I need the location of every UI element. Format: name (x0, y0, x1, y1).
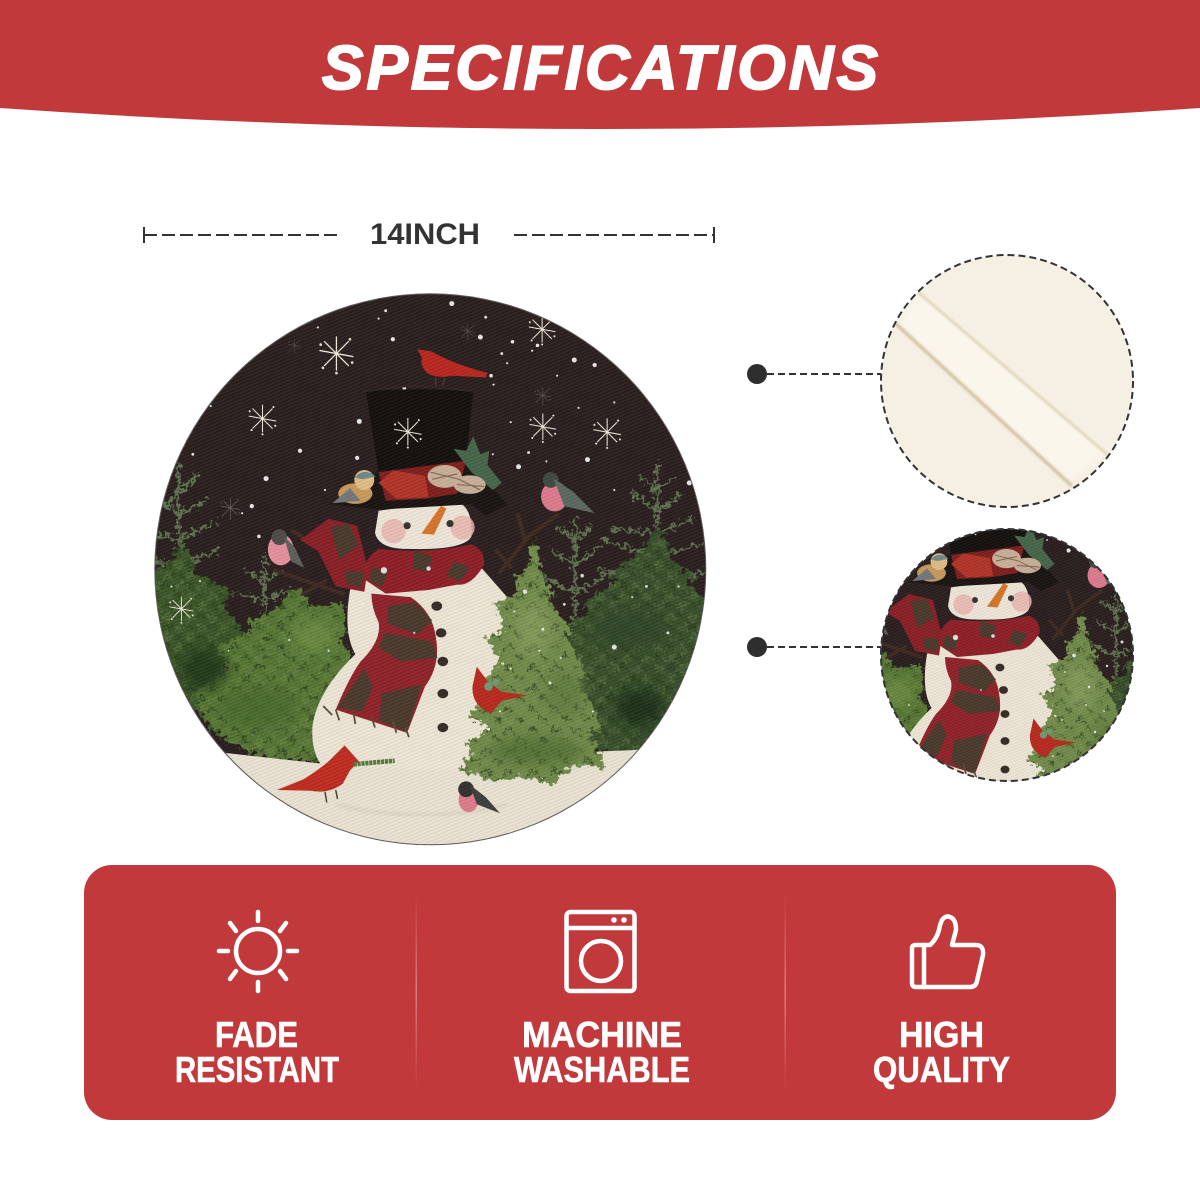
features panel (84, 865, 1116, 1120)
dimension line: 14 inch (144, 218, 714, 251)
callout marker (747, 364, 881, 384)
feature: fade resistant (175, 912, 339, 1090)
header banner (0, 0, 1200, 129)
label: HIGH (899, 1014, 984, 1055)
label: WASHABLE (514, 1049, 690, 1090)
icon: washing machine (566, 912, 634, 991)
main product: round snowman placemat (150, 290, 718, 850)
callout marker (747, 637, 881, 657)
label: MACHINE (522, 1014, 682, 1055)
label: RESISTANT (175, 1049, 339, 1090)
snowman close-up circle (880, 528, 1134, 782)
callout: pattern close-up (747, 528, 1134, 782)
title: SPECIFICATIONS (322, 34, 878, 103)
callout: fabric swatch (747, 255, 1133, 507)
icon: thumbs up (912, 916, 983, 987)
label: FADE (215, 1014, 298, 1055)
feature: machine washable (514, 912, 692, 1090)
linen fabric circle (881, 255, 1133, 507)
feature: high quality (873, 916, 1010, 1090)
icon: sun (219, 912, 297, 991)
dimension label: 14INCH (370, 218, 480, 251)
label: QUALITY (873, 1049, 1010, 1090)
